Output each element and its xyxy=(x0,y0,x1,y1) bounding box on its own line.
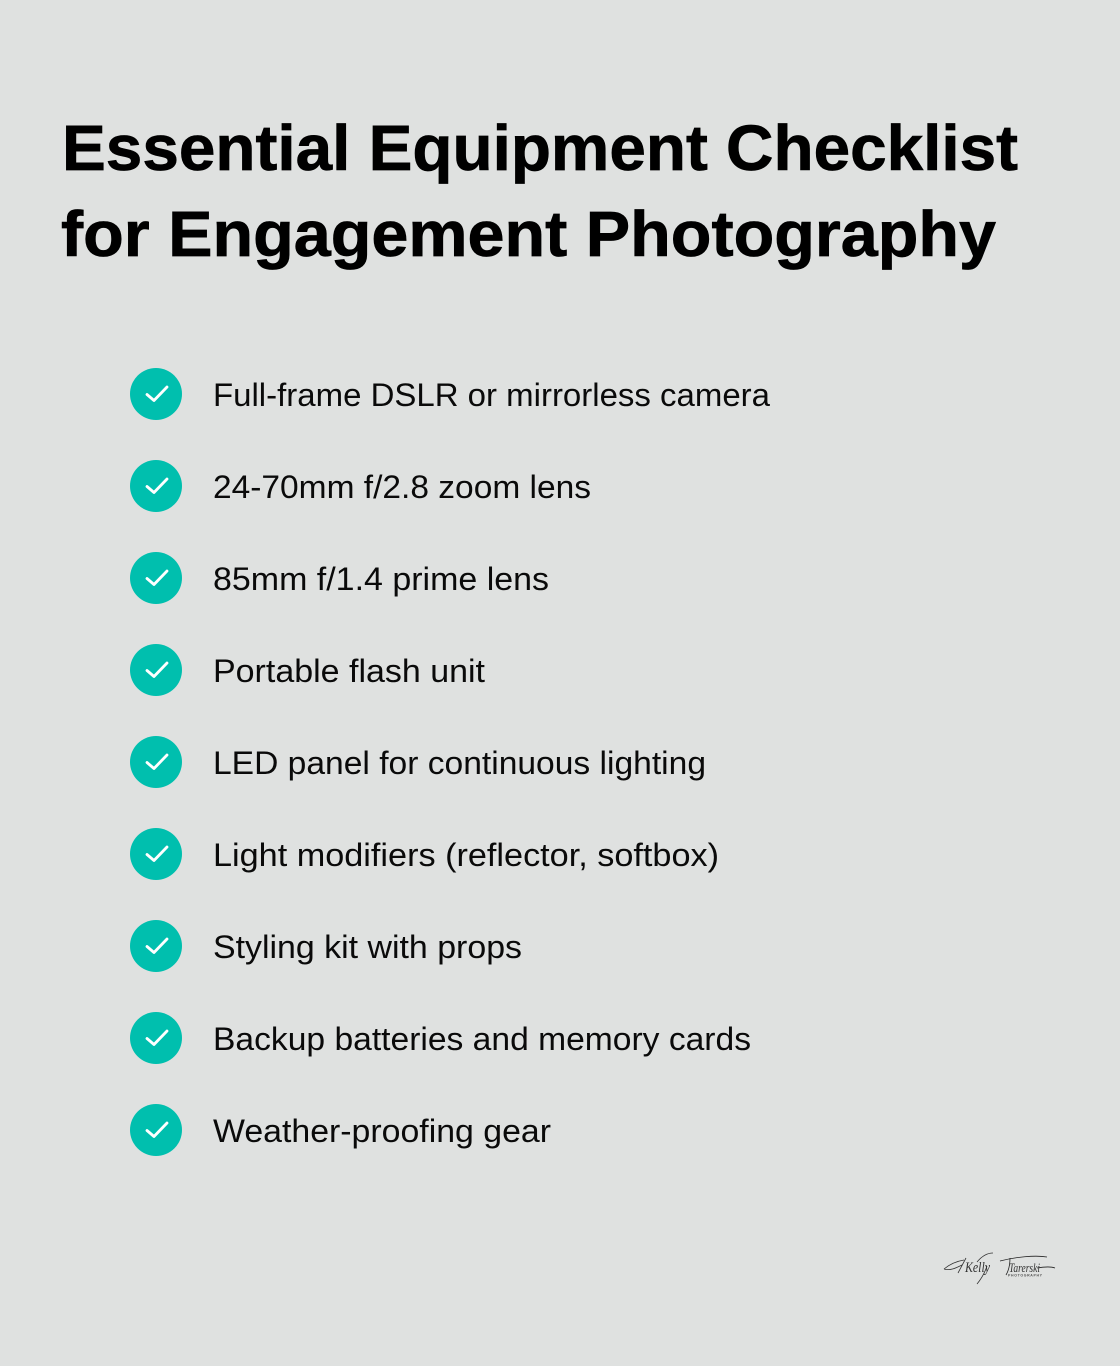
signature logo: PHOTOGRAPHY xyxy=(1008,1274,1043,1278)
title: Essential Equipment Checklist xyxy=(62,112,1018,184)
title xyxy=(61,112,1018,270)
title: for Engagement Photography xyxy=(61,198,996,270)
signature logo xyxy=(944,1253,1055,1284)
item: light modifiers xyxy=(130,828,719,880)
signature logo: Kelly xyxy=(964,1260,990,1276)
item: flash xyxy=(130,644,485,696)
item: weather-proofing: Weather-proofing gear xyxy=(213,1113,551,1149)
signature logo: Tarerski xyxy=(1009,1260,1040,1275)
item: prime lens xyxy=(130,552,549,604)
item: light modifiers: Light modifiers (reflector, softbox) xyxy=(213,837,719,873)
item: prime lens: 85mm f/1.4 prime lens xyxy=(213,561,549,597)
item: styling kit: Styling kit with props xyxy=(213,929,522,965)
item: styling kit xyxy=(130,920,522,972)
item: weather-proofing xyxy=(130,1104,551,1156)
item: camera: Full-frame DSLR or mirrorless camera xyxy=(213,377,770,413)
checklist xyxy=(130,368,770,1156)
item: LED panel xyxy=(130,736,706,788)
item: LED panel: LED panel for continuous lighting xyxy=(213,745,706,781)
item: zoom lens xyxy=(130,460,591,512)
item: batteries: Backup batteries and memory cards xyxy=(213,1021,751,1057)
item: batteries xyxy=(130,1012,751,1064)
item: camera xyxy=(130,368,770,420)
item: flash: Portable flash unit xyxy=(213,653,485,689)
item: zoom lens: 24-70mm f/2.8 zoom lens xyxy=(213,469,591,505)
